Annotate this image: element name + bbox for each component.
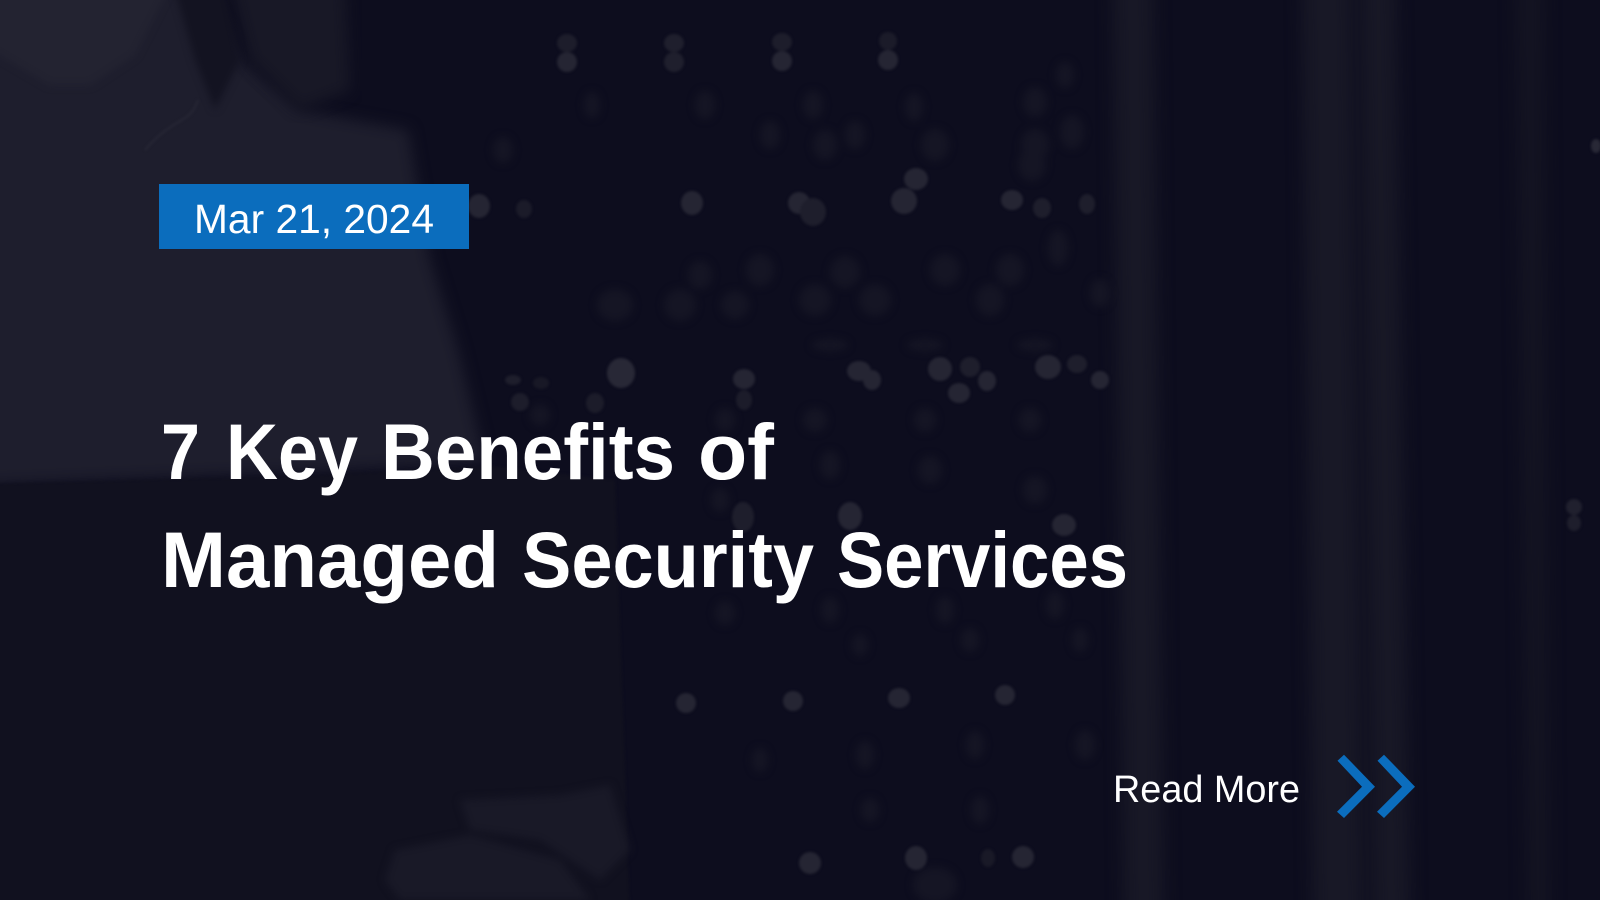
collar and beard shading — [0, 0, 168, 85]
date badge: Mar 21, 2024 — [194, 196, 434, 242]
title: Key — [226, 407, 358, 496]
title — [161, 407, 1128, 604]
title: of — [698, 407, 775, 496]
title: Managed — [161, 515, 499, 604]
title: Services — [837, 515, 1128, 604]
read more link: Read More — [1113, 769, 1300, 811]
bright bokeh server lights — [468, 32, 1600, 874]
title: Benefits — [381, 407, 675, 496]
person: shirt and torso — [0, 0, 630, 900]
blurred faint server lights — [493, 62, 1110, 900]
icon: double chevron arrow — [1337, 755, 1415, 818]
person: hand holding laptop — [385, 785, 630, 900]
server rack vertical stripes — [1113, 0, 1549, 900]
date badge — [159, 184, 469, 249]
title: Security — [522, 515, 814, 604]
title: 7 — [161, 407, 200, 496]
